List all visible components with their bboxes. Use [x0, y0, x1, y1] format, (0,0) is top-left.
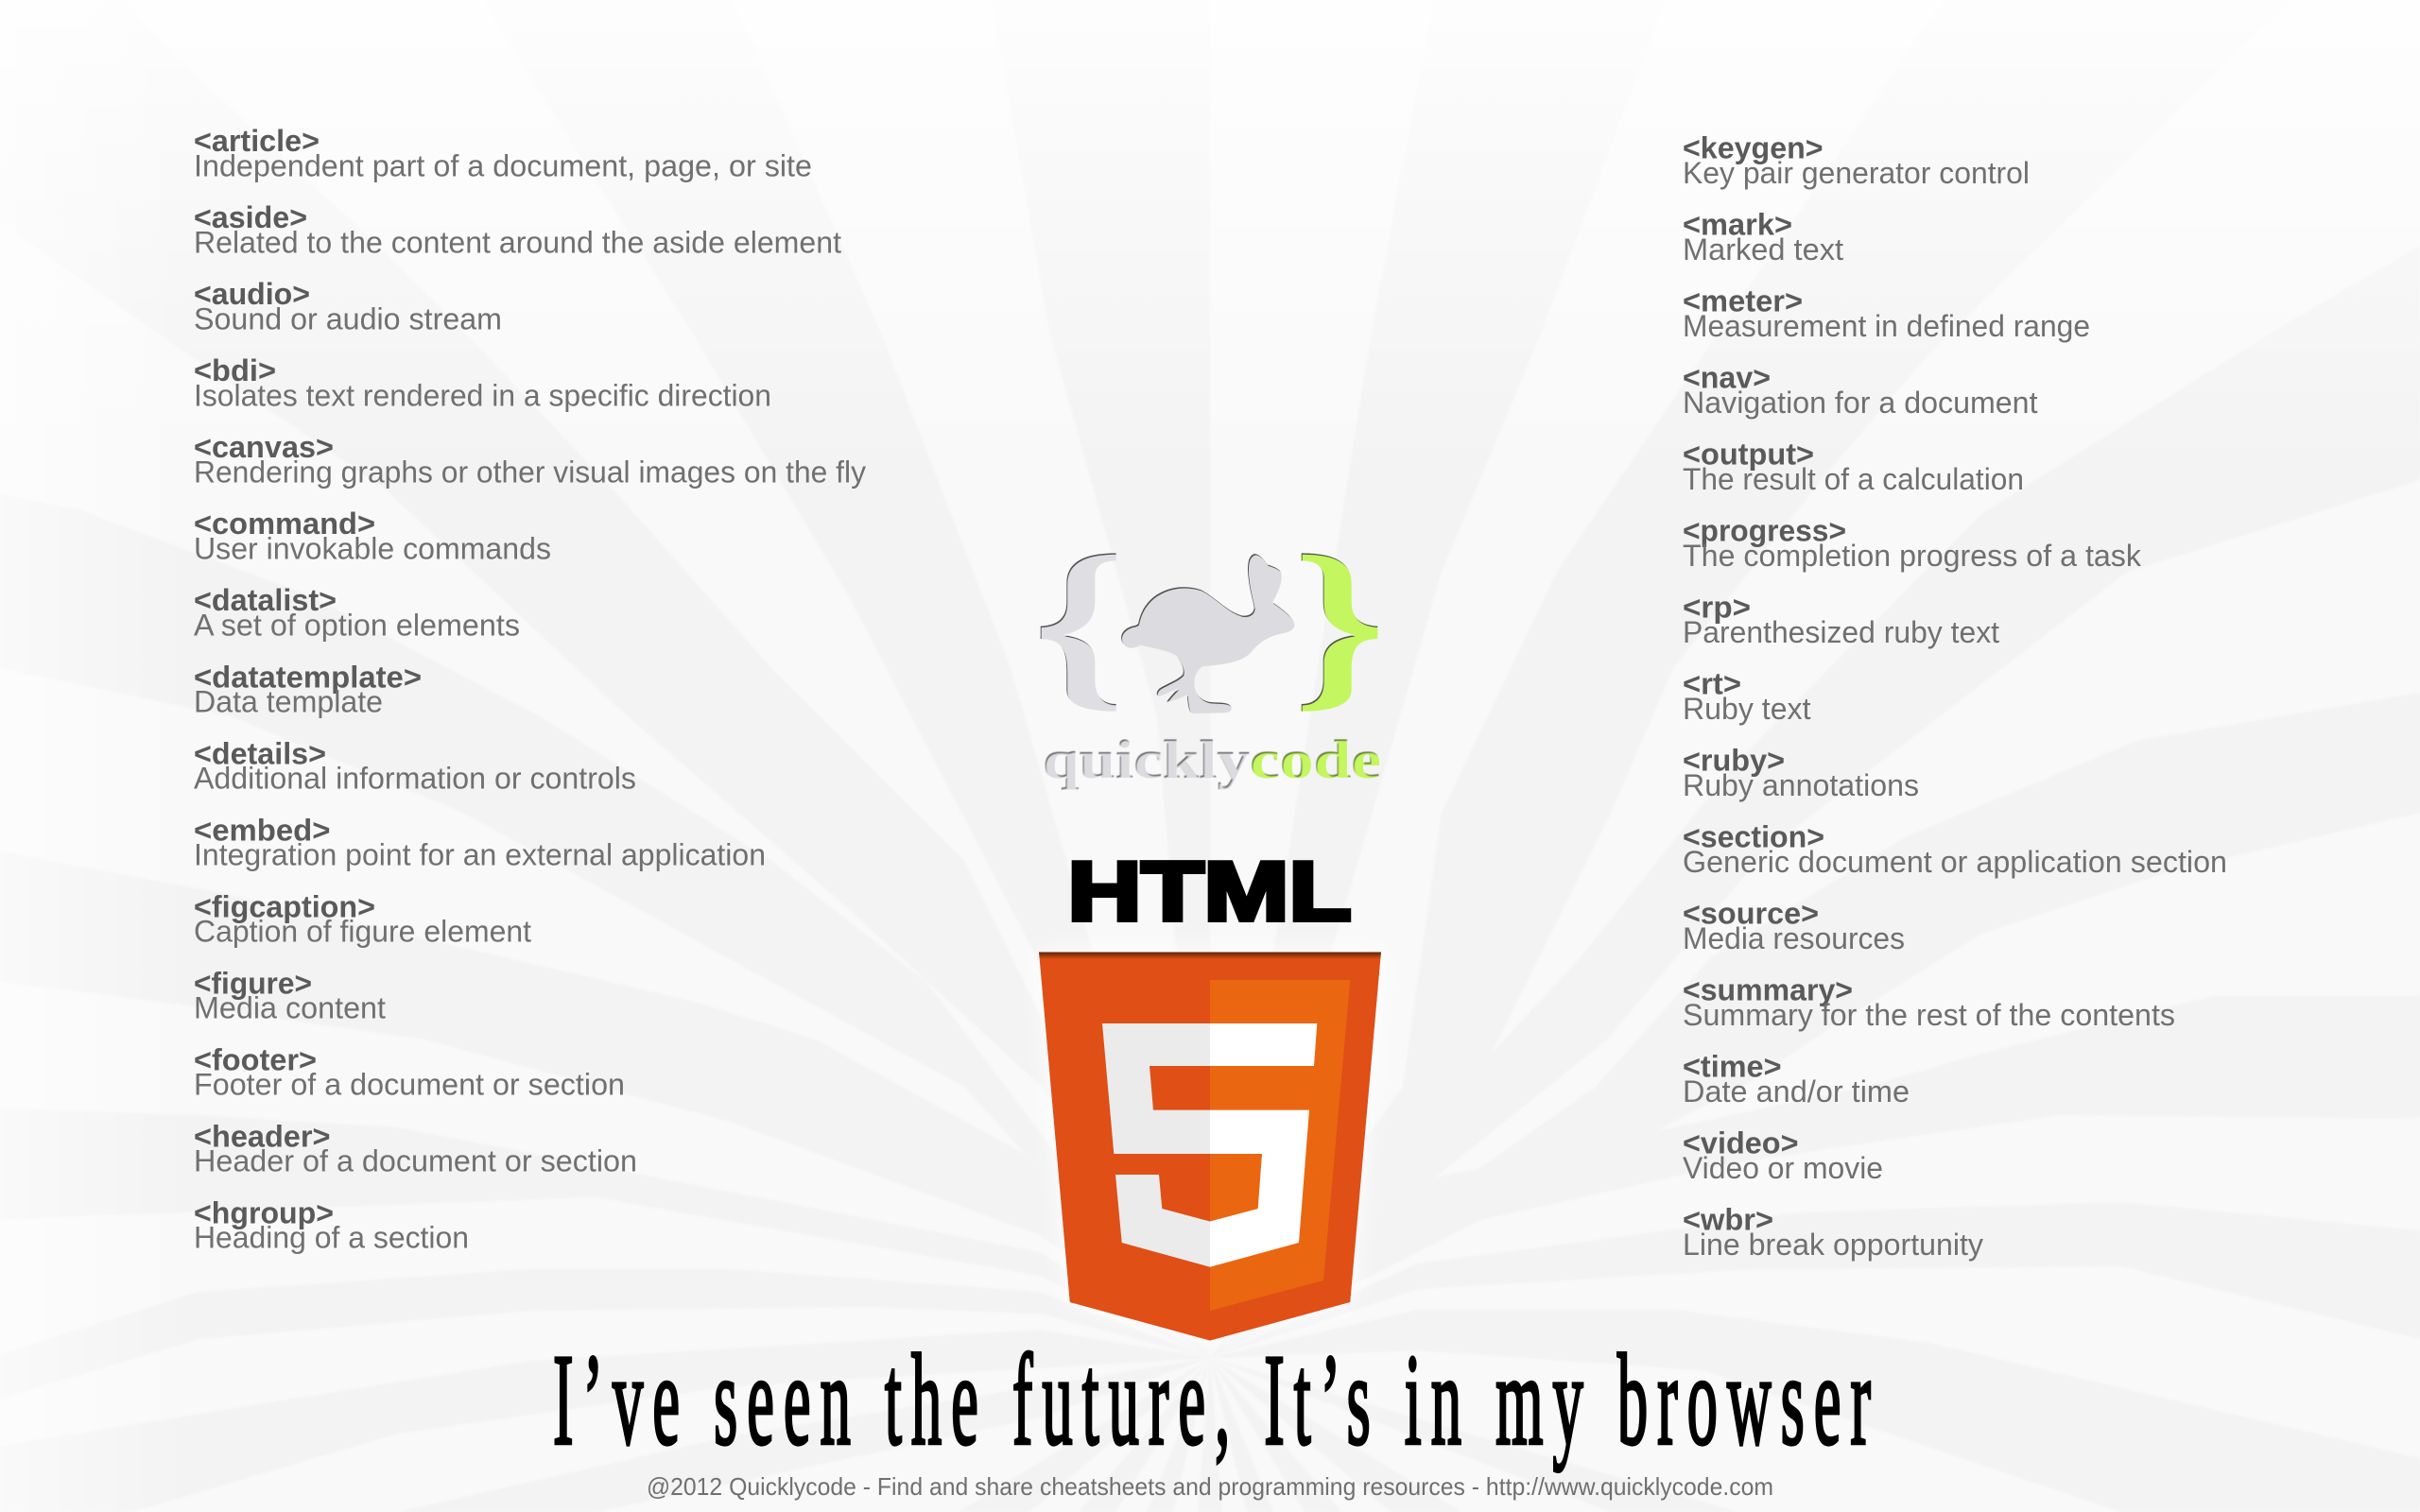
- item: keygen: Key pair generator control: [1683, 156, 2030, 190]
- item: time: Date and/or time: [1683, 1074, 1910, 1108]
- item: nav: Navigation for a document: [1683, 386, 2038, 420]
- item: summary: [1683, 973, 2175, 1032]
- item: time: <time>: [1683, 1049, 1781, 1083]
- item: article: Independent part of a document, page, or site: [194, 149, 812, 183]
- item: video: <video>: [1683, 1126, 1798, 1160]
- item: article: [194, 124, 812, 183]
- item: bdi: [194, 353, 771, 412]
- item: wbr: <wbr>: [1683, 1202, 1773, 1236]
- item: video: Video or movie: [1683, 1151, 1883, 1185]
- item: figcaption: Caption of figure element: [194, 915, 531, 949]
- item: bdi: Isolates text rendered in a specific direction: [194, 378, 771, 412]
- item: progress: <progress>: [1683, 514, 1846, 548]
- item: footer: Footer of a document or section: [194, 1068, 625, 1102]
- item: footer: [194, 1043, 625, 1102]
- item: audio: Sound or audio stream: [194, 302, 502, 336]
- item: figure: Media content: [194, 990, 386, 1024]
- item: embed: [194, 813, 766, 871]
- item: figure: <figure>: [194, 966, 312, 1000]
- item: ruby: <ruby>: [1683, 743, 1785, 777]
- item: rp: [1683, 590, 1999, 649]
- item: output: The result of a calculation: [1683, 462, 2024, 496]
- item: section: [1683, 820, 2227, 879]
- item: embed: <embed>: [194, 813, 331, 847]
- item: rt: Ruby text: [1683, 692, 1811, 726]
- icon: HTML5 shield: [1039, 953, 1381, 1341]
- item: nav: <nav>: [1683, 361, 1771, 395]
- footer credit: @2012 Quicklycode - Find and share cheatsheets and programming resources - http://www.quicklycode.com: [647, 1472, 1773, 1501]
- item: rp: Parenthesized ruby text: [1683, 615, 1999, 649]
- item: details: Additional information or controls: [194, 762, 636, 796]
- item: details: [194, 737, 636, 796]
- item: section: Generic document or application section: [1683, 845, 2227, 879]
- heading: HTML: HTML: [1068, 845, 1352, 937]
- item: rt: [1683, 667, 1811, 726]
- item: canvas: [194, 430, 866, 490]
- item: meter: <meter>: [1683, 284, 1803, 318]
- panel: left element list: [194, 124, 866, 1255]
- item: source: <source>: [1683, 896, 1819, 930]
- item: datalist: [194, 583, 520, 643]
- item: command: <command>: [194, 507, 375, 541]
- item: keygen: <keygen>: [1683, 130, 1824, 164]
- item: figcaption: [194, 890, 531, 949]
- item: datatemplate: <datatemplate>: [194, 660, 422, 694]
- item: figure: [194, 966, 386, 1024]
- item: rt: <rt>: [1683, 667, 1741, 701]
- item: ruby: Ruby annotations: [1683, 768, 1919, 802]
- item: mark: <mark>: [1683, 208, 1792, 242]
- item: wbr: [1683, 1202, 1983, 1262]
- item: summary: <summary>: [1683, 973, 1853, 1007]
- item: audio: [194, 277, 502, 336]
- item: canvas: <canvas>: [194, 430, 334, 464]
- item: video: [1683, 1126, 1883, 1185]
- item: datalist: A set of option elements: [194, 609, 520, 643]
- item: aside: [194, 200, 841, 259]
- item: audio: <audio>: [194, 277, 310, 311]
- tagline: I’ve seen the future, It’s in my browser: [553, 1329, 1871, 1472]
- item: hgroup: <hgroup>: [194, 1196, 334, 1230]
- quicklycode logo: [1041, 553, 1381, 790]
- item: aside: <aside>: [194, 200, 307, 234]
- item: meter: [1683, 284, 2090, 343]
- item: datalist: <datalist>: [194, 583, 337, 617]
- item: mark: [1683, 208, 1843, 266]
- item: datatemplate: [194, 660, 422, 718]
- item: header: <header>: [194, 1119, 331, 1153]
- item: figcaption: <figcaption>: [194, 890, 375, 924]
- item: footer: <footer>: [194, 1043, 317, 1077]
- item: keygen: [1683, 130, 2030, 190]
- item: hgroup: Heading of a section: [194, 1221, 469, 1255]
- wordmark: quicklycode: code: [1250, 729, 1381, 790]
- item: ruby: [1683, 743, 1919, 802]
- item: section: <section>: [1683, 820, 1824, 854]
- item: output: <output>: [1683, 437, 1814, 471]
- item: output: [1683, 437, 2024, 496]
- item: rp: <rp>: [1683, 590, 1751, 624]
- item: header: [194, 1119, 637, 1177]
- panel: right element list: [1683, 130, 2227, 1262]
- item: source: Media resources: [1683, 921, 1905, 955]
- item: source: [1683, 896, 1905, 955]
- item: aside: Related to the content around the aside element: [194, 225, 841, 259]
- item: meter: Measurement in defined range: [1683, 309, 2090, 343]
- item: embed: Integration point for an external application: [194, 837, 766, 871]
- item: header: Header of a document or section: [194, 1143, 637, 1177]
- item: hgroup: [194, 1196, 469, 1255]
- item: command: [194, 507, 551, 565]
- wordmark: quicklycode: [1043, 729, 1381, 790]
- item: command: User invokable commands: [194, 531, 551, 565]
- item: datatemplate: Data template: [194, 684, 383, 718]
- item: details: <details>: [194, 737, 326, 771]
- item: mark: Marked text: [1683, 232, 1843, 266]
- item: progress: The completion progress of a task: [1683, 539, 2142, 573]
- item: article: <article>: [194, 124, 320, 158]
- item: canvas: Rendering graphs or other visual images on the fly: [194, 455, 866, 490]
- item: nav: [1683, 361, 2038, 420]
- icon: braces and rabbit: [1041, 553, 1377, 713]
- item: wbr: Line break opportunity: [1683, 1228, 1983, 1262]
- wordmark: quicklycode: quickly: [1043, 729, 1250, 790]
- item: summary: Summary for the rest of the contents: [1683, 998, 2175, 1032]
- item: progress: [1683, 514, 2142, 573]
- item: bdi: <bdi>: [194, 353, 276, 387]
- item: time: [1683, 1049, 1910, 1108]
